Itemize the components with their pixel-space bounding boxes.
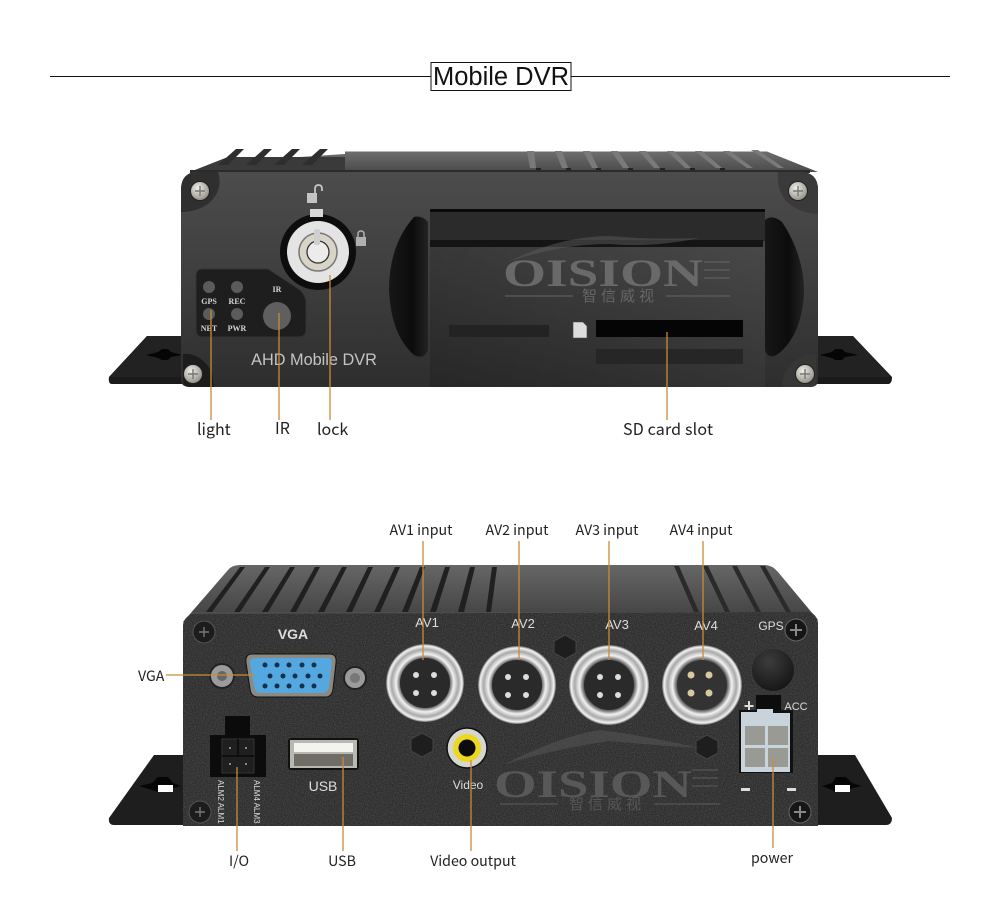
port labels: + bbox=[744, 696, 754, 716]
small hex screws bbox=[411, 635, 718, 759]
callout: light bbox=[197, 310, 231, 440]
port labels: AV4 bbox=[694, 618, 718, 633]
VGA port bbox=[210, 654, 366, 697]
alarm I/O connector bbox=[210, 716, 266, 777]
callout: AV4 input: AV4 input bbox=[670, 520, 733, 540]
panel: DVR front view bbox=[109, 149, 892, 387]
SD card door bbox=[389, 209, 804, 387]
AV1 connector bbox=[386, 644, 464, 722]
callout: lock: lock bbox=[317, 416, 348, 440]
GPS connector cap bbox=[752, 649, 794, 691]
callout: VGA bbox=[138, 666, 255, 686]
rear faceplate bbox=[183, 612, 818, 826]
LED and IR panel bbox=[196, 269, 306, 337]
port labels bbox=[216, 615, 808, 824]
port labels: ALM4 ALM3 bbox=[252, 780, 261, 824]
callout: VGA: VGA bbox=[138, 666, 165, 686]
port labels: AV2 bbox=[511, 616, 535, 631]
port labels: ACC bbox=[784, 701, 808, 713]
watermark logo: OISION bbox=[494, 763, 692, 806]
callout: AV2 input: AV2 input bbox=[486, 520, 549, 540]
watermark logo: OISION bbox=[503, 252, 703, 295]
callout: AV2 input bbox=[486, 520, 549, 660]
LED and IR panel: IR bbox=[273, 285, 282, 294]
rear panel screws bbox=[189, 619, 811, 823]
callout: I/O bbox=[229, 767, 249, 871]
USB port bbox=[288, 738, 359, 770]
front faceplate bbox=[181, 172, 818, 387]
right mounting tab bbox=[816, 336, 892, 384]
left mounting tab bbox=[109, 755, 186, 825]
watermark logo: 智信威视 bbox=[569, 793, 645, 814]
RCA video port bbox=[447, 728, 487, 768]
LED and IR panel: NET bbox=[201, 324, 218, 333]
AV4 connector bbox=[662, 645, 742, 725]
port labels: VGA bbox=[278, 626, 308, 642]
callout: SD card slot: SD card slot bbox=[623, 416, 713, 440]
icon: SD card bbox=[573, 322, 587, 338]
callout: AV1 input bbox=[390, 520, 453, 660]
LED and IR panel: REC bbox=[229, 297, 246, 306]
title bbox=[50, 62, 950, 91]
callout: USB bbox=[328, 757, 356, 871]
callout: AV3 input bbox=[576, 520, 639, 660]
AV2 connector bbox=[478, 646, 556, 724]
port labels: GPS bbox=[758, 619, 784, 633]
device name: AHD Mobile DVR bbox=[251, 351, 377, 369]
corner screws bbox=[181, 172, 818, 387]
port labels: AV3 bbox=[605, 617, 629, 632]
left mounting tab bbox=[109, 336, 184, 384]
callout: IR bbox=[275, 313, 290, 439]
LED and IR panel: GPS bbox=[201, 297, 217, 306]
watermark logo: 智信威视 bbox=[582, 285, 658, 306]
top cooling ribs bbox=[190, 149, 818, 173]
callout: AV4 input bbox=[670, 520, 733, 660]
panel: DVR rear view bbox=[109, 565, 892, 826]
left handle recess bbox=[389, 217, 428, 357]
callout: IR: IR bbox=[275, 415, 290, 439]
callout: AV3 input: AV3 input bbox=[576, 520, 639, 540]
watermark logo bbox=[494, 730, 720, 814]
callout: AV1 input: AV1 input bbox=[390, 520, 453, 540]
callout: Video output bbox=[430, 760, 517, 871]
port labels: Video bbox=[453, 778, 484, 792]
top cooling fins bbox=[183, 565, 818, 622]
key lock bbox=[280, 185, 366, 290]
port labels: AV1 bbox=[415, 615, 439, 630]
title: Mobile DVR bbox=[433, 63, 569, 91]
callout: power bbox=[751, 758, 794, 868]
right mounting tab bbox=[816, 755, 892, 825]
callout: USB: USB bbox=[328, 851, 356, 871]
AV3 connector bbox=[569, 645, 649, 725]
watermark logo bbox=[503, 236, 730, 306]
callout: SD card slot bbox=[623, 332, 713, 440]
callout: I/O: I/O bbox=[229, 851, 249, 871]
callout: Video output: Video output bbox=[430, 851, 517, 871]
port labels: ALM2 ALM1 bbox=[216, 780, 225, 824]
callout: power: power bbox=[751, 848, 794, 868]
right handle recess bbox=[765, 217, 804, 356]
port labels: USB bbox=[309, 778, 337, 794]
callout: light: light bbox=[197, 416, 231, 440]
ACC power connector bbox=[739, 695, 793, 773]
LED and IR panel: PWR bbox=[228, 324, 247, 333]
